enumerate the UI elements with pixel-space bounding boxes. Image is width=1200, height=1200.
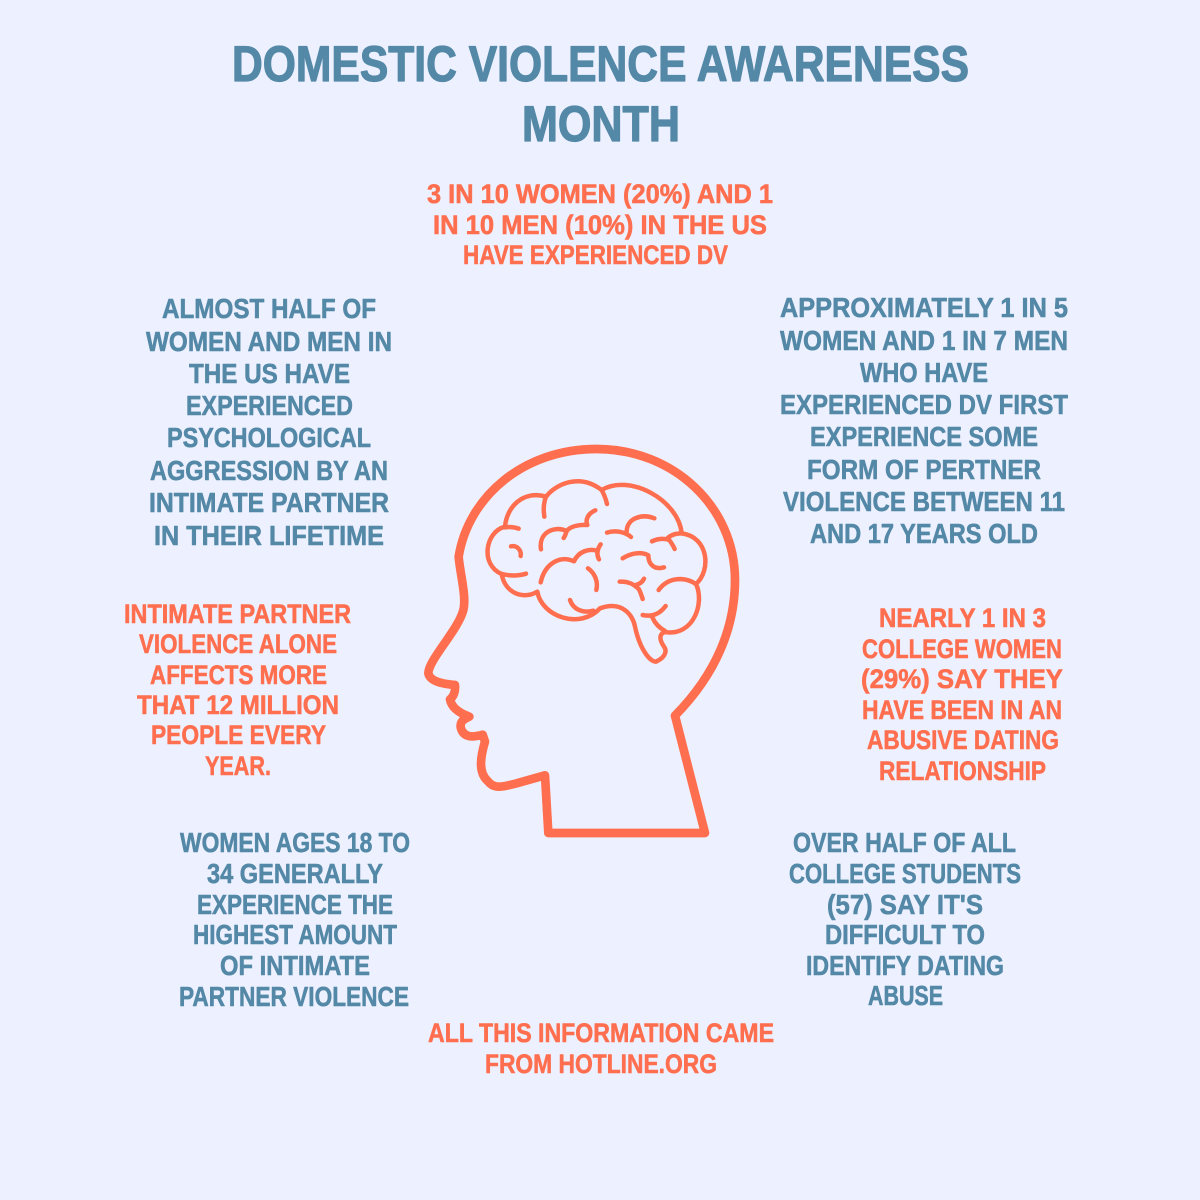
text block: women ages 18 to 34 statistic: EXPERIENCE THE — [197, 889, 393, 920]
text block: psychological aggression statistic: WOMEN AND MEN IN — [146, 326, 392, 357]
text block: 3 in 10 women statistic: IN 10 MEN (10%) IN THE US — [433, 210, 767, 240]
text block: college students statistic: (57) SAY IT'S — [827, 889, 983, 920]
text block: source note — [428, 1018, 774, 1079]
title: MONTH — [522, 96, 680, 152]
text block: psychological aggression statistic: EXPERIENCED — [186, 390, 353, 421]
icon: head with brain — [428, 449, 735, 833]
text block: 3 in 10 women statistic: 3 IN 10 WOMEN (20%) AND 1 — [427, 179, 773, 209]
text block: college women statistic: RELATIONSHIP — [879, 756, 1046, 786]
text block: source note: ALL THIS INFORMATION CAME — [428, 1018, 774, 1048]
text block: 3 in 10 women statistic — [427, 179, 773, 270]
text block: college students statistic: IDENTIFY DATING — [806, 950, 1004, 981]
text block: college students statistic: OVER HALF OF ALL — [793, 827, 1016, 858]
text block: women ages 18 to 34 statistic: PARTNER VIOLENCE — [179, 981, 409, 1012]
text block: 12 million people statistic: YEAR. — [205, 751, 271, 781]
text block: first experience age statistic: FORM OF PERTNER — [807, 454, 1041, 485]
text block: college students statistic: ABUSE — [868, 980, 943, 1011]
text block: college women statistic: (29%) SAY THEY — [861, 664, 1063, 694]
text block: first experience age statistic: EXPERIENCED DV FIRST — [780, 389, 1068, 420]
text block: psychological aggression statistic: ALMOST HALF OF — [162, 293, 376, 324]
text block: 12 million people statistic: PEOPLE EVERY — [151, 720, 326, 750]
head outline — [428, 449, 735, 833]
text block: college students statistic — [789, 827, 1021, 1011]
text block: college women statistic: ABUSIVE DATING — [867, 725, 1059, 755]
text block: first experience age statistic: WHO HAVE — [860, 357, 988, 388]
text block: college students statistic: DIFFICULT TO — [825, 919, 985, 950]
text block: women ages 18 to 34 statistic: 34 GENERALLY — [207, 858, 383, 889]
text block: psychological aggression statistic: PSYCHOLOGICAL — [167, 422, 371, 453]
text block: 12 million people statistic: VIOLENCE ALONE — [139, 629, 337, 659]
text block: 3 in 10 women statistic: HAVE EXPERIENCED DV — [463, 240, 728, 270]
text block: source note: FROM HOTLINE.ORG — [485, 1049, 717, 1079]
text block: 12 million people statistic: AFFECTS MORE — [150, 660, 327, 690]
text block: first experience age statistic: VIOLENCE BETWEEN 11 — [783, 486, 1065, 517]
text block: women ages 18 to 34 statistic: OF INTIMATE — [220, 950, 370, 981]
text block: women ages 18 to 34 statistic: WOMEN AGES 18 TO — [180, 827, 410, 858]
text block: college women statistic: NEARLY 1 IN 3 — [879, 603, 1046, 633]
text block: college women statistic — [861, 603, 1063, 786]
text block: psychological aggression statistic: IN THEIR LIFETIME — [154, 520, 384, 551]
text block: 12 million people statistic: THAT 12 MILLION — [137, 690, 339, 720]
text block: psychological aggression statistic: THE US HAVE — [189, 358, 350, 389]
text block: first experience age statistic: AND 17 YEARS OLD — [810, 518, 1038, 549]
text block: college women statistic: COLLEGE WOMEN — [862, 634, 1062, 664]
text block: 12 million people statistic: INTIMATE PARTNER — [124, 599, 351, 629]
text block: first experience age statistic: WOMEN AND 1 IN 7 MEN — [780, 325, 1068, 356]
text block: 12 million people statistic — [124, 599, 351, 781]
text block: psychological aggression statistic — [146, 293, 392, 551]
text block: first experience age statistic — [780, 292, 1068, 549]
text block: first experience age statistic: APPROXIMATELY 1 IN 5 — [780, 292, 1068, 323]
brain — [488, 481, 705, 662]
text block: women ages 18 to 34 statistic — [179, 827, 410, 1012]
title: DOMESTIC VIOLENCE AWARENESS — [232, 36, 969, 92]
text block: psychological aggression statistic: INTIMATE PARTNER — [149, 487, 389, 518]
text block: psychological aggression statistic: AGGRESSION BY AN — [150, 455, 388, 486]
text block: college women statistic: HAVE BEEN IN AN — [862, 695, 1062, 725]
title — [232, 36, 969, 152]
text block: first experience age statistic: EXPERIENCE SOME — [810, 421, 1038, 452]
text block: women ages 18 to 34 statistic: HIGHEST AMOUNT — [193, 919, 397, 950]
text block: college students statistic: COLLEGE STUDENTS — [789, 858, 1021, 889]
